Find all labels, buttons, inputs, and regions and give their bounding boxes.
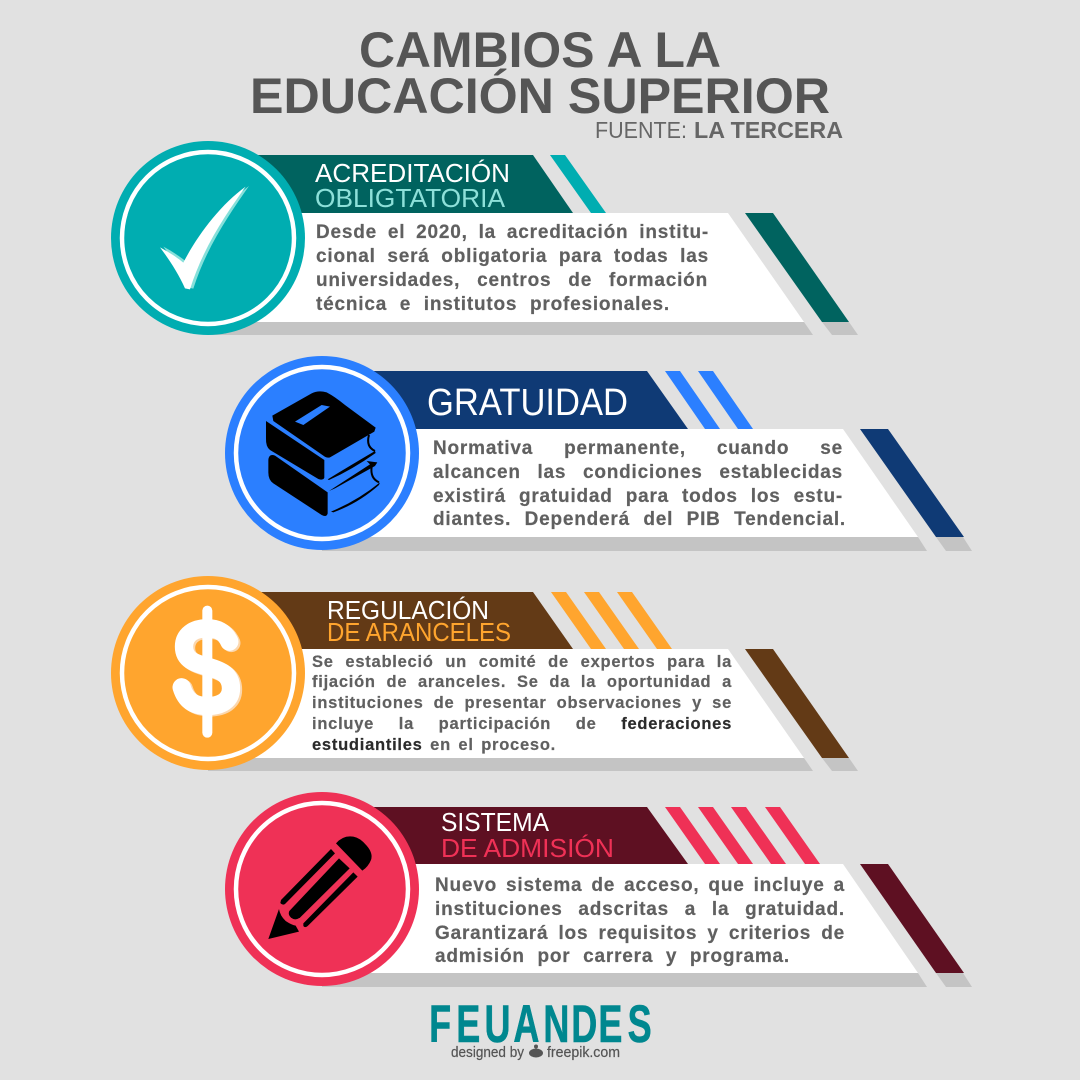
text block: aranceles	[312, 653, 732, 754]
text block: gratuidad	[433, 438, 846, 530]
credit: designed by freepik	[451, 1044, 620, 1061]
text block: admisión: Nuevo sistema de acceso, que incluye a	[435, 875, 845, 896]
panel: regulación de aranceles	[111, 576, 858, 771]
text block: gratuidad: Normativa permanente, cuando se	[433, 438, 843, 459]
panel: acreditación obligatoria	[111, 141, 858, 335]
heading: gratuidad: GRATUIDAD	[427, 382, 628, 424]
text block: admisión: instituciones adscritas a la gratuidad.	[435, 899, 845, 920]
icon: check mark	[160, 186, 249, 289]
text block: gratuidad: diantes. Dependerá del PIB Tendencial.	[433, 509, 846, 530]
heading: regulación de aranceles: REGULACIÓN	[327, 595, 489, 625]
text block: acreditación: técnica e institutos profesionales.	[316, 294, 670, 315]
text block: gratuidad: existirá gratuidad para todos los estu-	[433, 486, 843, 507]
text block: aranceles: Se estableció un comité de expertos para la	[312, 653, 732, 671]
source line	[595, 118, 843, 143]
heading: sistema de admisión: DE ADMISIÓN	[441, 833, 614, 863]
heading: sistema de admisión	[441, 807, 614, 863]
text block: aranceles: fijación de aranceles. Se da la oportunidad a	[312, 673, 732, 691]
heading: acreditación obligatoria: ACREDITACIÓN	[315, 158, 510, 188]
heading: acreditación obligatoria	[315, 158, 510, 213]
text block: admisión: Garantizará los requisitos y criterios de	[435, 923, 845, 944]
heading: regulación de aranceles	[327, 595, 511, 647]
panel: sistema de admisión	[225, 792, 972, 987]
title	[250, 22, 830, 120]
text block: acreditación: cional será obligatoria para todas las	[316, 246, 709, 267]
heading: sistema de admisión: SISTEMA	[441, 807, 550, 837]
icon: stack of books	[266, 391, 380, 516]
text block: acreditación: universidades, centros de formación	[316, 270, 708, 291]
icon: pencil	[268, 836, 372, 939]
text block: gratuidad: alcancen las condiciones establecidas	[433, 462, 843, 483]
heading: acreditación obligatoria: OBLIGTATORIA	[315, 183, 506, 213]
text block: aranceles: instituciones de presentar observaciones y se	[312, 694, 732, 712]
text block: aranceles: estudiantiles en el proceso.	[312, 736, 556, 754]
credit: designed by freepik: freepik.com	[547, 1045, 620, 1061]
credit: designed by freepik: designed by	[451, 1045, 525, 1061]
text block: acreditación: Desde el 2020, la acreditación institu-	[316, 222, 709, 243]
text block: admisión: admisión por carrera y programa.	[435, 946, 790, 967]
title: CAMBIOS A LA	[359, 22, 721, 78]
icon: dollar sign	[182, 611, 233, 733]
text block: admisión	[435, 875, 845, 967]
text block: aranceles: incluye la participación de federaciones	[312, 715, 732, 733]
text block: acreditación	[316, 222, 709, 315]
panel: gratuidad	[225, 356, 972, 551]
heading: regulación de aranceles: DE ARANCELES	[327, 617, 511, 647]
